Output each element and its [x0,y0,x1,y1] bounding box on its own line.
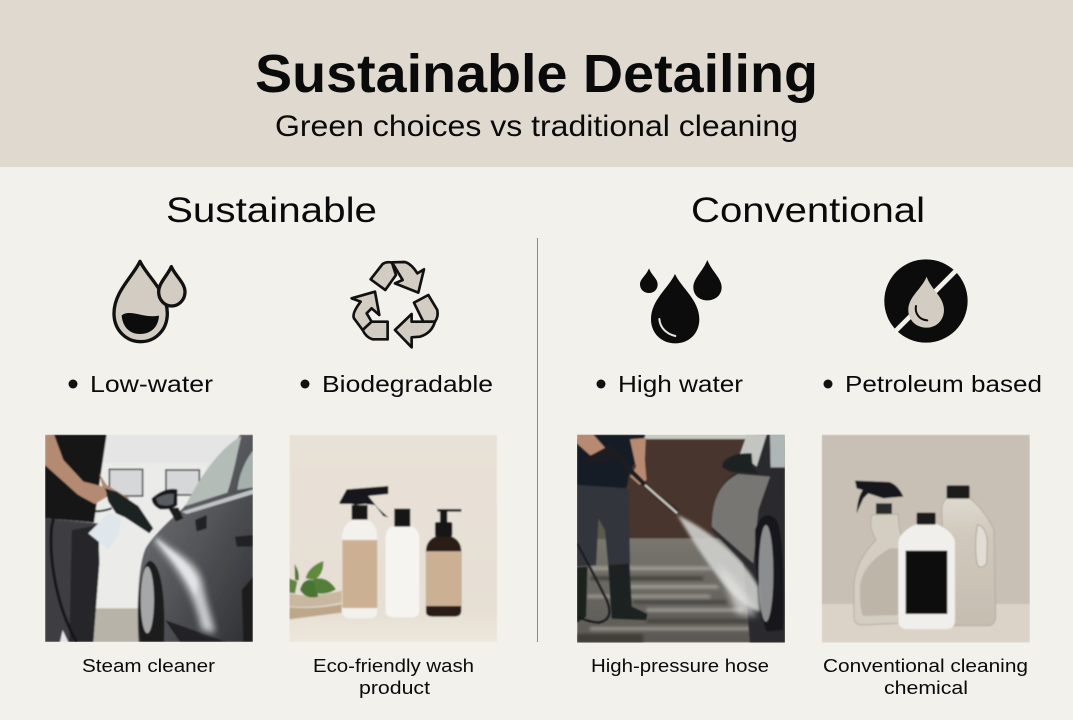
photo: high-pressure hose [577,435,785,643]
caption: conventional cleaning chemical: chemical [884,678,968,698]
center divider [536,238,538,642]
bullet: low-water: Low-water [90,371,213,397]
caption: steam cleaner: Steam cleaner [82,656,215,676]
bullet: petroleum based: Petroleum based [845,371,1042,397]
photo: steam cleaner [45,435,253,642]
photo: eco-friendly wash products [289,435,497,642]
heading: conventional: Conventional [691,191,925,230]
caption: conventional cleaning chemical: Conventional cleaning [823,656,1028,676]
title: Sustainable Detailing [255,44,818,104]
icon: high water drops [640,260,722,343]
caption: eco-friendly wash product [313,656,474,698]
caption: conventional cleaning chemical [823,656,1028,698]
bullet: high water: High water [618,371,743,397]
icon: recycling arrows [352,262,438,347]
header banner [0,0,1073,167]
icon: petroleum drop prohibited [884,259,968,343]
caption: eco-friendly wash product: product [359,678,430,698]
bullet: biodegradable: Biodegradable [322,371,493,397]
caption: eco-friendly wash product: Eco-friendly wash [313,656,474,676]
photo: conventional chemicals [822,435,1030,643]
caption: high-pressure hose: High-pressure hose [591,656,769,676]
heading: sustainable: Sustainable [166,191,377,230]
icon: low water drops [114,261,185,342]
subtitle: Green choices vs traditional cleaning [275,110,798,143]
